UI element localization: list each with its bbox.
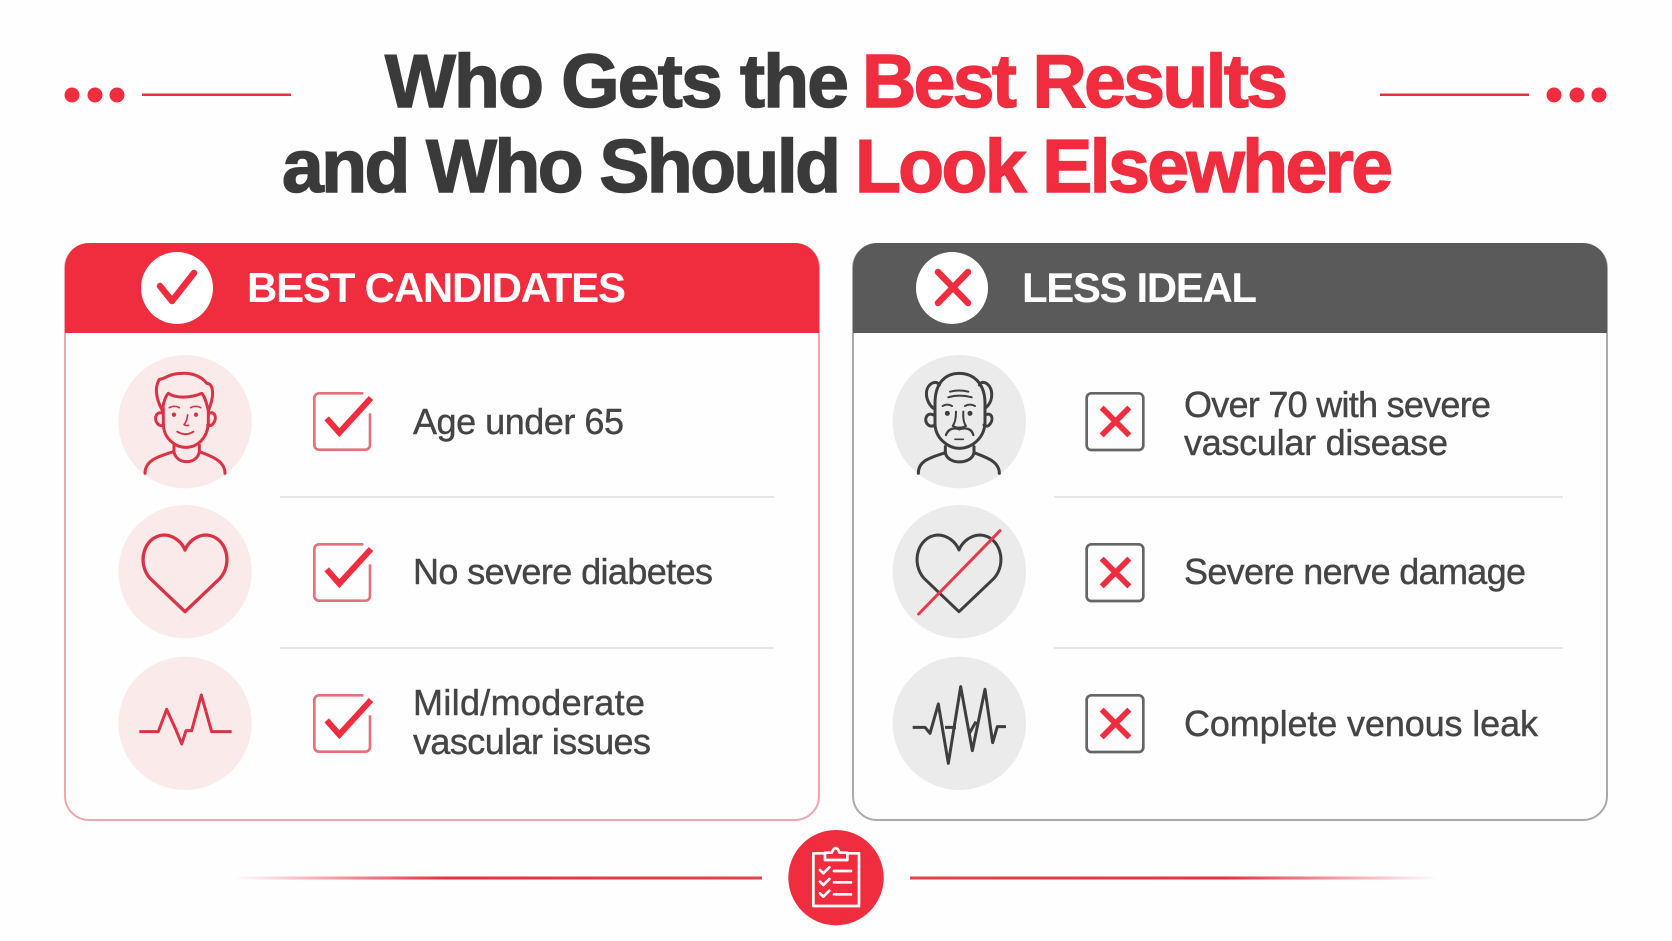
text: no severe diabetes: No severe diabetes <box>413 551 713 592</box>
icon: young man <box>118 355 252 488</box>
icon: x box row 1 <box>1087 393 1143 450</box>
panel outline <box>65 244 819 820</box>
icon: x box row 2 <box>1087 544 1143 601</box>
icon: erratic pulse <box>893 657 1026 790</box>
title line 1: Who Gets the <box>385 39 849 123</box>
heading: best candidates: BEST CANDIDATES <box>247 264 626 311</box>
panel: best candidates <box>65 243 819 820</box>
icon: check box row 2 <box>314 544 371 601</box>
icon: x box row 3 <box>1087 695 1143 752</box>
text: complete venous leak: Complete venous leak <box>1184 703 1539 744</box>
icon: clipboard badge <box>788 830 884 925</box>
footer left line <box>235 876 762 880</box>
icon: header check <box>141 252 213 324</box>
icon: heart <box>118 505 252 638</box>
title line 2: Look Elsewhere <box>855 124 1393 208</box>
title line 2: and Who Should <box>282 124 841 208</box>
heading: less ideal: LESS IDEAL <box>1022 264 1257 311</box>
footer right line <box>910 876 1437 880</box>
text: mild moderate vascular issues: Mild/moderate <box>413 682 645 723</box>
icon: old man <box>893 355 1026 488</box>
icon: check box row 3 <box>314 695 371 752</box>
text: severe nerve damage: Severe nerve damage <box>1184 551 1526 592</box>
text: over 70 with severe vascular disease: vascular disease <box>1184 422 1448 463</box>
decoration: left dots and line <box>64 88 291 102</box>
decoration: right dots and line <box>1380 88 1606 102</box>
title <box>282 39 1393 208</box>
panel header <box>853 243 1607 333</box>
text: over 70 with severe vascular disease: Over 70 with severe <box>1184 384 1491 425</box>
panel: less ideal <box>853 243 1607 820</box>
icon: check box row 1 <box>314 393 371 450</box>
title line 1: Best Results <box>862 39 1288 123</box>
icon: header x <box>916 252 988 324</box>
icon: mild pulse <box>118 657 252 790</box>
icon: crossed heart <box>893 505 1026 638</box>
panel header <box>65 243 819 333</box>
panel outline <box>853 244 1607 820</box>
text: mild moderate vascular issues: vascular issues <box>413 721 651 762</box>
text: age under 65: Age under 65 <box>413 401 624 442</box>
